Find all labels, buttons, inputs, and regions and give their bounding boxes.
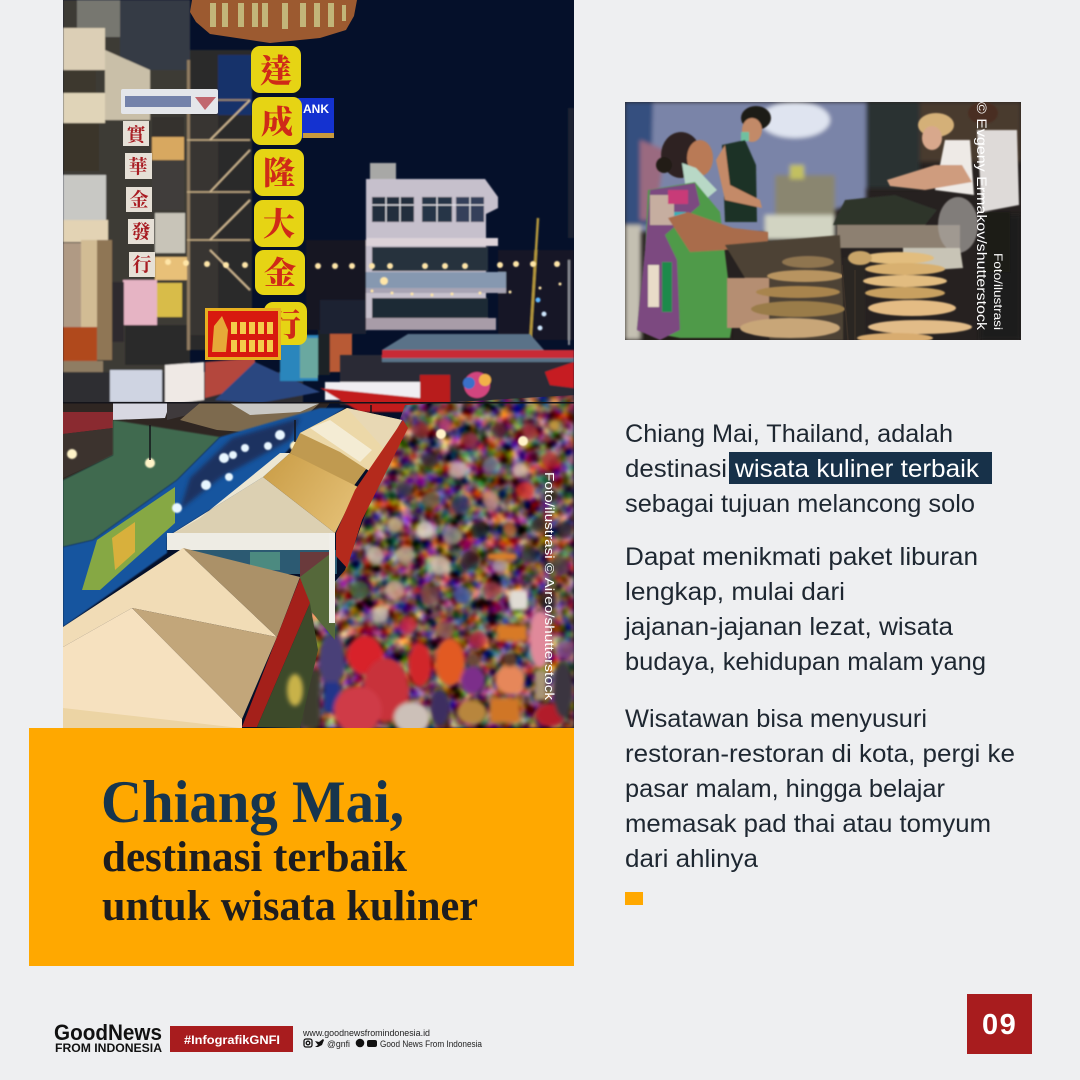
logo: GoodNews From Indonesia: FROM INDONESIA [55,1041,162,1055]
photo: Chiang Mai night market street [63,0,574,734]
photo credit: © Evgeny Ermakov/shutterstock [974,102,989,330]
top wooden sign [190,0,357,43]
yellow signs with red Chinese characters [251,46,307,346]
logo: GoodNews From Indonesia: GoodNews [54,1020,162,1045]
red tent edge [336,420,408,568]
blue lights [172,430,285,513]
left shophouses [63,0,188,373]
photo: grilled fish stall [625,102,1021,343]
yellow signs with red Chinese characters: 行 [269,300,301,346]
vertical white signs with red characters [123,120,155,277]
website and social handles [302,1028,482,1049]
body text paragraph 3: memasak pad thai atau tomyum [625,810,991,838]
vertical white signs with red characters: 行 [132,250,152,277]
page number [967,994,1032,1054]
body text paragraph 3: dari ahlinya [625,845,758,873]
tent 3 (far) [290,408,402,487]
stall backdrop [625,102,1021,340]
body text paragraph 1: destinasi [625,455,727,483]
vertical white signs with red characters: 金 [129,185,149,212]
body text paragraph 3: Wisatawan bisa menyusuri [625,705,927,733]
website and social handles: @gnfi [327,1039,350,1049]
string lights [165,259,562,330]
bank sign [298,98,334,138]
blue lit stalls [63,408,345,627]
yellow signs with red Chinese characters: 大 [263,199,295,245]
pole [528,217,540,338]
blue shop front and awning [280,335,318,381]
body text paragraph 3 [625,705,1015,873]
body text paragraph 2: budaya, kehidupan malam yang [625,648,986,676]
title panel [29,728,574,966]
hashtag badge [170,1026,293,1052]
photo label: Foto/ilustrasi [991,253,1005,330]
photo credit: Foto/ilustrasi © Aireo/shutterstock [542,472,557,701]
signs and awning above left roof [63,403,330,480]
tent 1 (front) [63,548,277,647]
vertical white signs with red characters: 實 [126,120,147,147]
logo: GoodNews From Indonesia [54,1020,162,1055]
yellow signs with red Chinese characters: 隆 [263,148,295,194]
tent 2 (middle) [174,477,335,533]
body text paragraph 1 [625,420,992,518]
heading: destinasi terbaik: destinasi terbaik [102,834,407,881]
vertical white signs with red characters: 華 [128,152,148,179]
body text paragraph 2: lengkap, mulai dari [625,578,845,606]
yellow signs with red Chinese characters: 金 [264,248,296,294]
hanging bulbs [67,429,528,468]
page number: 09 [982,1009,1017,1041]
heading: Chiang Mai: Chiang Mai, [101,769,404,835]
heading: untuk wisata kuliner: untuk wisata kuliner [102,883,478,930]
distant building [370,163,396,179]
vertical white signs with red characters: 發 [131,217,151,244]
boy in apron [716,106,771,222]
orange end marker [625,892,643,905]
red Thai sign [205,308,281,360]
highlight: wisata kuliner terbaik [734,455,980,483]
stall goods [257,603,318,728]
green banners [82,487,175,590]
stall underside [192,550,337,574]
woman in patterned dress [637,132,768,340]
crowd blobs [351,418,574,663]
body text paragraph 1: Chiang Mai, Thailand, adalah [625,420,953,448]
body text paragraph 2 [624,543,986,676]
yellow signs with red Chinese characters: 達 [260,46,292,92]
grilled fish [740,251,972,343]
icon: facebook [356,1039,364,1047]
body text paragraph 2: Dapat menikmati paket liburan [625,543,978,571]
stage and red stall far end [320,334,574,412]
body text paragraph 3: restoran-restoran di kota, pergi ke [625,740,1015,768]
crowd noise base [300,395,574,734]
shop sign: white Thai sign [121,89,218,114]
blonde woman and man [886,102,1020,218]
website and social handles: Good News From Indonesia [380,1039,482,1049]
body text paragraph 3: pasar malam, hingga belajar [625,775,945,803]
body text paragraph 2: jajanan-jajanan lezat, wisata [624,613,953,641]
red valance [242,578,310,727]
market stalls and crowd [63,334,574,734]
hashtag badge: #InfografikGNFI [184,1033,280,1047]
left roof [63,420,220,547]
website and social handles: www.goodnewsfromindonesia.id [302,1028,430,1038]
bank sign: ANK [303,102,329,116]
yellow signs with red Chinese characters: 成 [261,97,293,143]
mussels and metal tray [725,195,978,340]
icon: youtube [367,1040,377,1047]
icon: instagram [304,1039,312,1047]
body text paragraph 1: sebagai tujuan melancong solo [625,490,975,518]
icon: twitter [315,1039,324,1047]
